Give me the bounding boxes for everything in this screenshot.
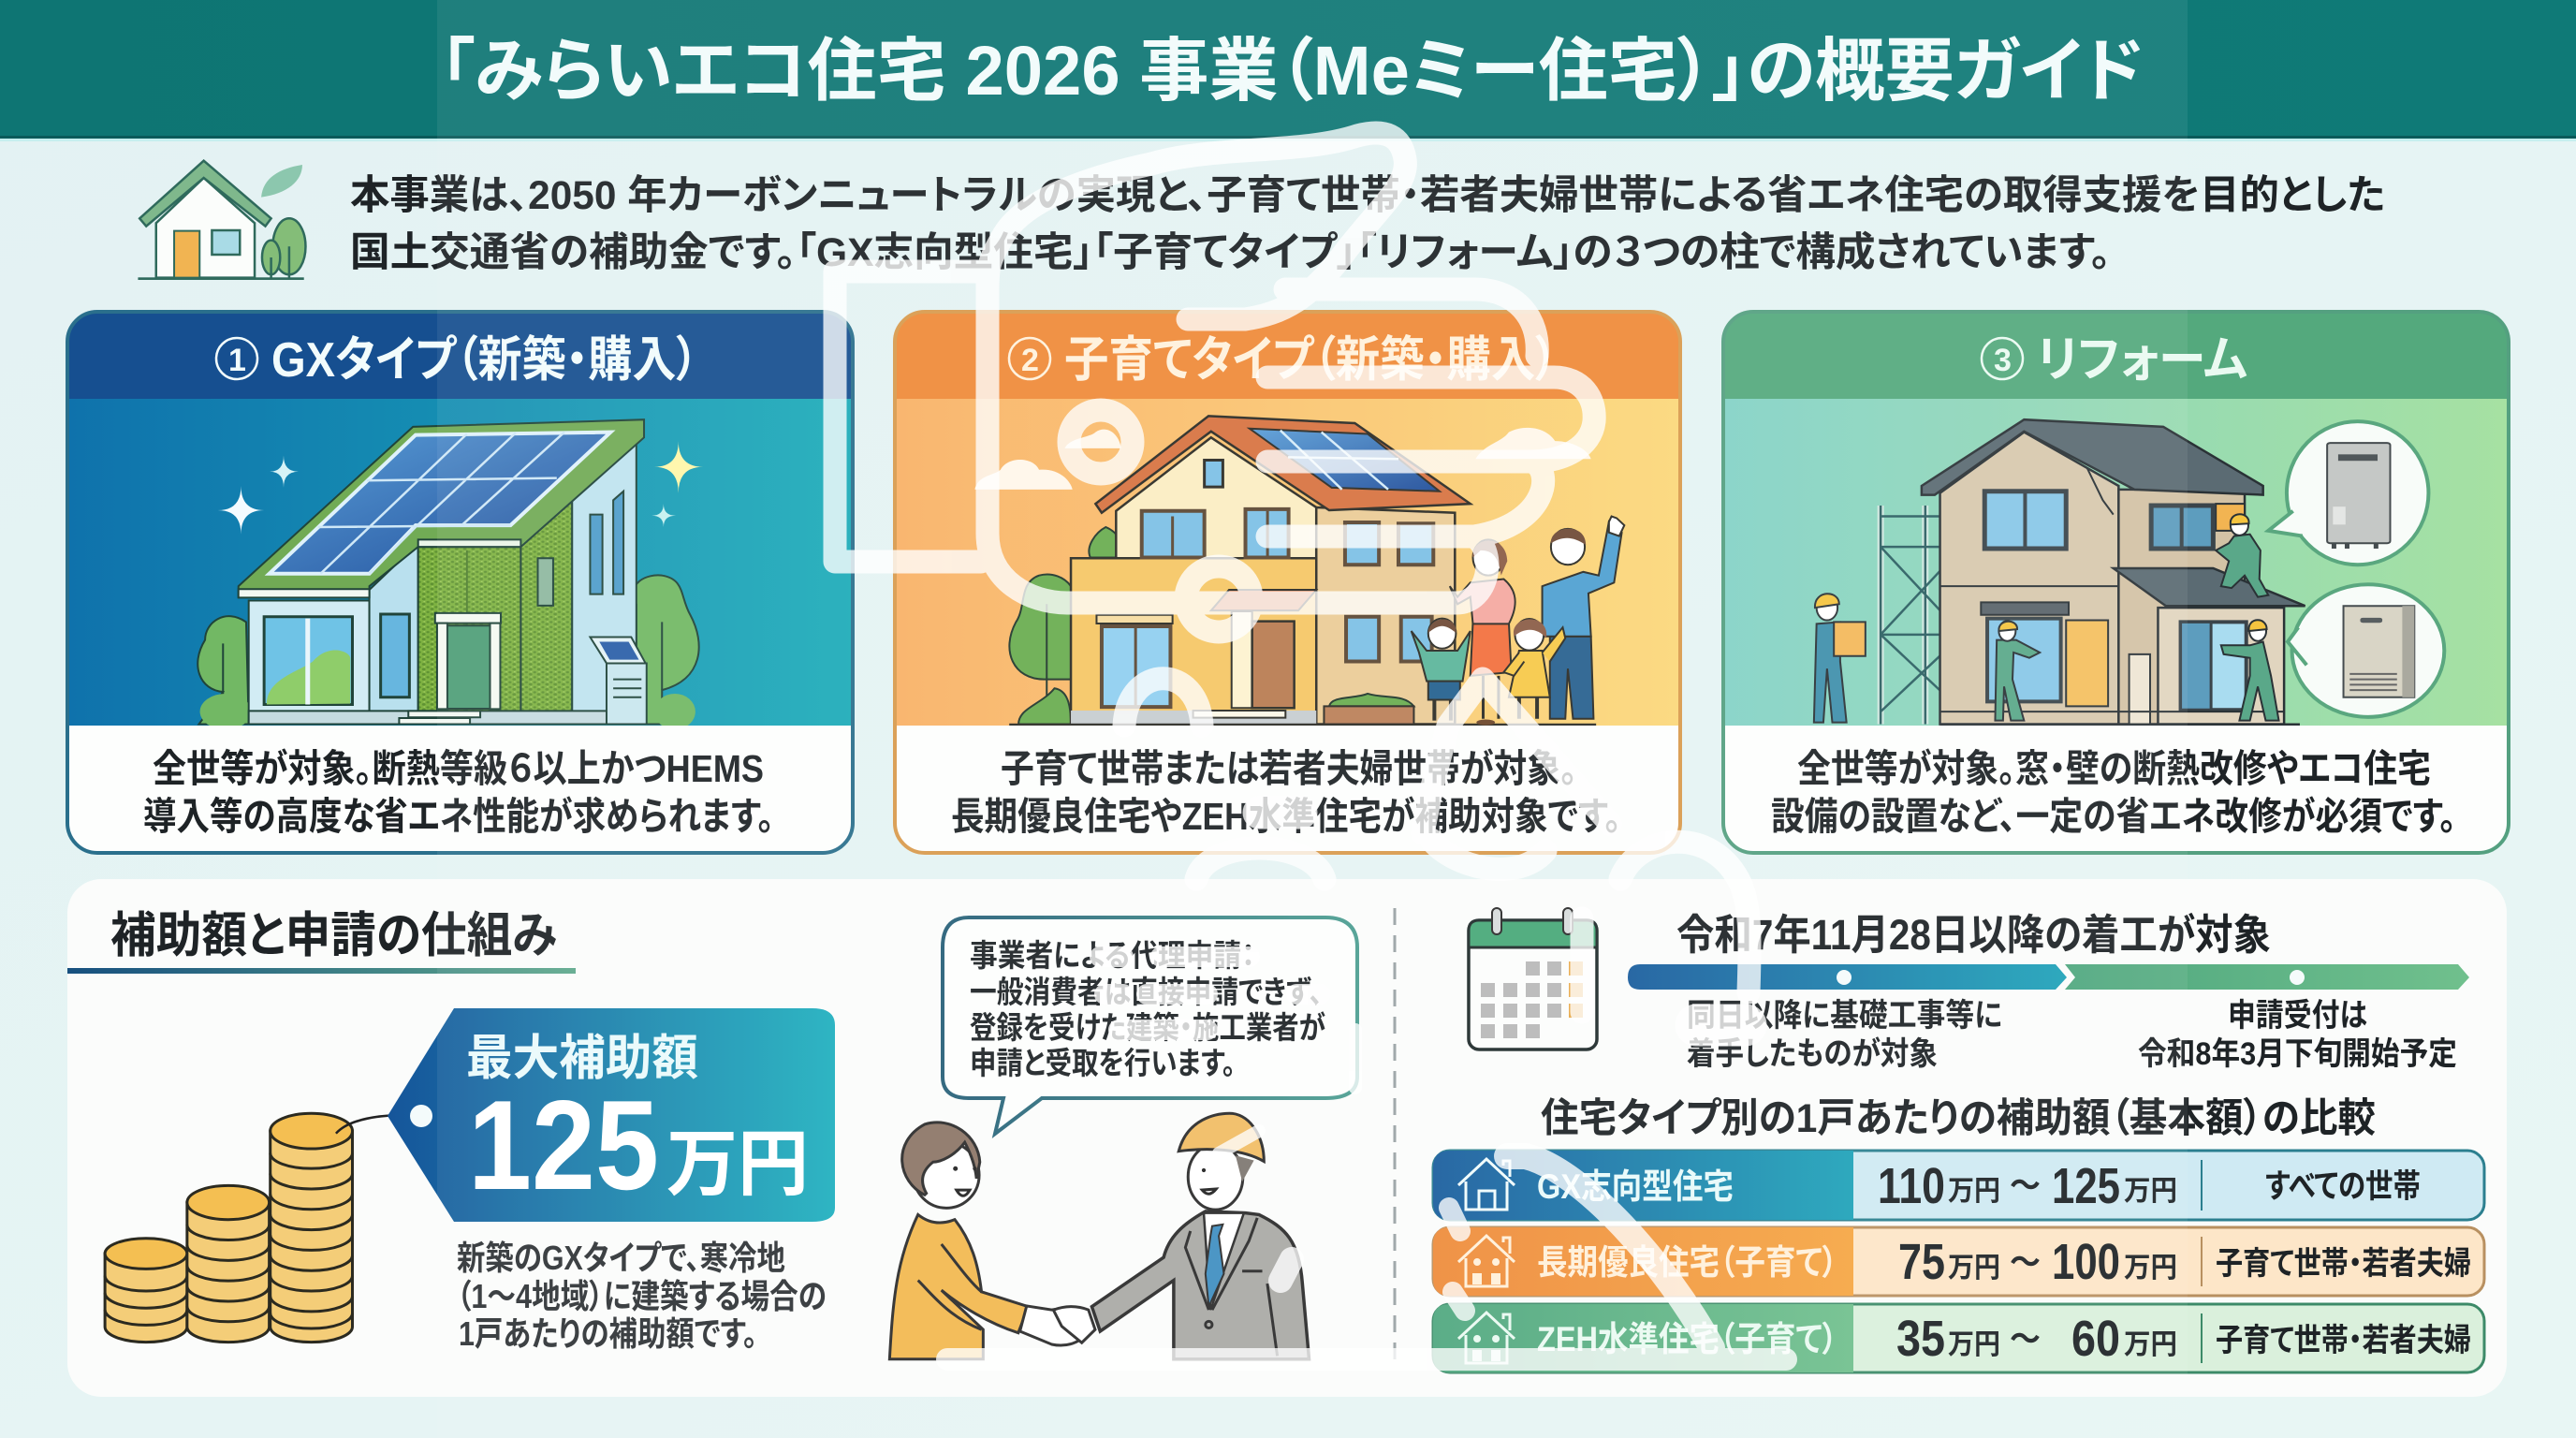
panel: child-rearing type bbox=[895, 312, 1680, 853]
row: ZEH housing: 35 bbox=[1896, 1311, 1945, 1367]
row: ZEH housing: 60 bbox=[2071, 1311, 2120, 1367]
panel 3 border bbox=[1723, 312, 2509, 853]
timeline note: construction: 同日以降に基礎工事等に bbox=[1687, 998, 2002, 1034]
price tag: maximum subsidy: 万円 bbox=[666, 1123, 809, 1205]
price tag: maximum subsidy: 最大補助額 bbox=[466, 1032, 698, 1086]
row: long-life housing: 万円 bbox=[1948, 1253, 2000, 1284]
row: long-life housing: ～ bbox=[2010, 1245, 2041, 1281]
panel 3 description: 設備の設置など、一定の省エネ改修が必須です。 bbox=[1771, 795, 2456, 838]
row: ZEH housing: ～ bbox=[2010, 1322, 2041, 1357]
panel 1 text box bbox=[67, 726, 853, 853]
subsidy note: （1〜4地域）に建築する場合の bbox=[457, 1277, 827, 1315]
timeline note: application: 令和8年3月下旬開始予定 bbox=[2138, 1036, 2457, 1072]
watermark overlay bbox=[835, 133, 1786, 1359]
header band bbox=[0, 0, 2576, 141]
panel 2 heading: 子育てタイプ（新築・購入） bbox=[1064, 333, 1558, 388]
callout: proxy application: 事業者による代理申請： bbox=[970, 938, 1255, 973]
panel 2 description: 子育て世帯または若者夫婦世帯が対象。 bbox=[1001, 747, 1577, 790]
row: GX: 110 bbox=[1878, 1158, 1945, 1214]
timeline note: application: 申請受付は bbox=[2228, 998, 2367, 1034]
row: ZEH housing: 子育て世帯・若者夫婦 bbox=[2216, 1323, 2471, 1358]
row: GX: すべての世帯 bbox=[2265, 1168, 2421, 1205]
timeline note: construction bbox=[1687, 998, 2002, 1072]
icon: house with leaf bbox=[138, 161, 305, 280]
panel 1 heading: GXタイプ（新築・購入） bbox=[271, 333, 698, 388]
callout: proxy application bbox=[943, 917, 1357, 1134]
panel 1 number badge: 1 bbox=[228, 343, 246, 378]
lighter vertical band bbox=[437, 0, 2188, 1438]
illustration: family house bbox=[974, 416, 1624, 726]
panel 1 number badge bbox=[216, 338, 257, 379]
panel 1 description: 導入等の高度な省エネ性能が求められます。 bbox=[143, 795, 774, 838]
icon: coin stacks bbox=[105, 1113, 418, 1343]
panel 1 border bbox=[67, 312, 853, 853]
row: long-life housing: 子育て世帯・若者夫婦 bbox=[2216, 1246, 2471, 1282]
row: ZEH housing: ZEH水準住宅（子育て） bbox=[1537, 1320, 1837, 1358]
subsidy note: 新築のGXタイプで、寒冷地 bbox=[457, 1239, 785, 1277]
panel 3 description bbox=[1771, 747, 2456, 838]
panel: GX type bbox=[67, 312, 853, 853]
row: ZEH housing: 万円 bbox=[2124, 1329, 2177, 1360]
comparison table heading: 住宅タイプ別の1戸あたりの補助額（基本額）の比較 bbox=[1541, 1096, 2376, 1141]
row: long-life housing bbox=[1433, 1227, 2484, 1296]
intro text: 国土交通省の補助金です。「GX志向型住宅」「子育てタイプ」「リフォーム」の３つの柱で構成されています。 bbox=[350, 230, 2111, 275]
callout: proxy application: 一般消費者は直接申請できず、 bbox=[970, 975, 1323, 1009]
panel 2 description: 長期優良住宅やZEH水準住宅が補助対象です。 bbox=[951, 795, 1621, 838]
panel 1 scene background bbox=[67, 399, 853, 726]
panel 2 header bbox=[895, 312, 1680, 399]
panel 3 number badge: 3 bbox=[1994, 343, 2012, 378]
subsidy note bbox=[457, 1239, 827, 1353]
panel 3 header bbox=[1723, 312, 2509, 399]
row: GX: GX志向型住宅 bbox=[1537, 1167, 1734, 1206]
row: GX: 万円 bbox=[2124, 1176, 2177, 1207]
comparison table bbox=[1433, 1151, 2484, 1372]
panel: renovation bbox=[1723, 312, 2509, 853]
panel 3 description: 全世等が対象。窓・壁の断熱改修やエコ住宅 bbox=[1797, 747, 2431, 790]
timeline heading: 令和7年11月28日以降の着工が対象 bbox=[1676, 911, 2271, 959]
row: ZEH housing: 万円 bbox=[1948, 1329, 2000, 1360]
row: GX: 万円 bbox=[1948, 1176, 2000, 1207]
row: GX: ～ bbox=[2010, 1168, 2041, 1204]
subsidy note: 1戸あたりの補助額です。 bbox=[459, 1314, 757, 1353]
callout: proxy application: 登録を受けた建築・施工業者が bbox=[970, 1010, 1325, 1045]
row: long-life housing: 長期優良住宅（子育て） bbox=[1537, 1243, 1837, 1282]
panel 2 number badge: 2 bbox=[1021, 343, 1039, 378]
icon: calendar bbox=[1469, 908, 1597, 1049]
row: long-life housing: 75 bbox=[1898, 1234, 1945, 1290]
panel 3 heading: リフォーム bbox=[2037, 333, 2247, 388]
title: 「みらいエコ住宅 2026 事業（Meミー住宅）」の概要ガイド bbox=[440, 32, 2144, 110]
row: long-life housing: 100 bbox=[2052, 1234, 2120, 1290]
panel 3 text box bbox=[1723, 726, 2509, 853]
panel 2 scene background bbox=[895, 399, 1680, 726]
row: ZEH housing bbox=[1433, 1304, 2484, 1372]
illustration: handshake bbox=[889, 1113, 1310, 1359]
intro text: 本事業は、2050 年カーボンニュートラルの実現と、子育て世帯・若者夫婦世帯による省エネ住宅の取得支援を目的とした bbox=[350, 173, 2385, 218]
panel 2 border bbox=[895, 312, 1680, 853]
illustration: GX house bbox=[198, 419, 703, 729]
section heading: 補助額と申請の仕組み bbox=[110, 909, 557, 963]
dashed divider bbox=[1393, 908, 1397, 1370]
timeline note: application bbox=[2138, 998, 2457, 1072]
panel 2 number badge bbox=[1009, 338, 1050, 379]
callout: proxy application: 申請と受取を行います。 bbox=[970, 1046, 1236, 1080]
panel 1 header bbox=[67, 312, 853, 399]
row: GX bbox=[1433, 1151, 2484, 1220]
timeline note: construction: 着手したものが対象 bbox=[1687, 1035, 1938, 1072]
price tag: maximum subsidy bbox=[388, 1008, 835, 1222]
timeline bar bbox=[1628, 964, 2469, 990]
panel 2 description bbox=[951, 747, 1621, 838]
row: long-life housing: 万円 bbox=[2124, 1253, 2177, 1284]
row: GX: 125 bbox=[2052, 1158, 2120, 1214]
panel 1 description bbox=[143, 747, 774, 838]
panel 3 number badge bbox=[1982, 338, 2023, 379]
panel 1 description: 全世等が対象。断熱等級６以上かつHEMS bbox=[153, 747, 764, 790]
panel 2 text box bbox=[895, 726, 1680, 853]
panel 3 scene background bbox=[1723, 399, 2509, 726]
panel: subsidy and application bbox=[67, 879, 2507, 1397]
illustration: renovation house bbox=[1814, 419, 2444, 725]
price tag: maximum subsidy: 125 bbox=[468, 1074, 659, 1216]
intro text bbox=[350, 173, 2385, 275]
